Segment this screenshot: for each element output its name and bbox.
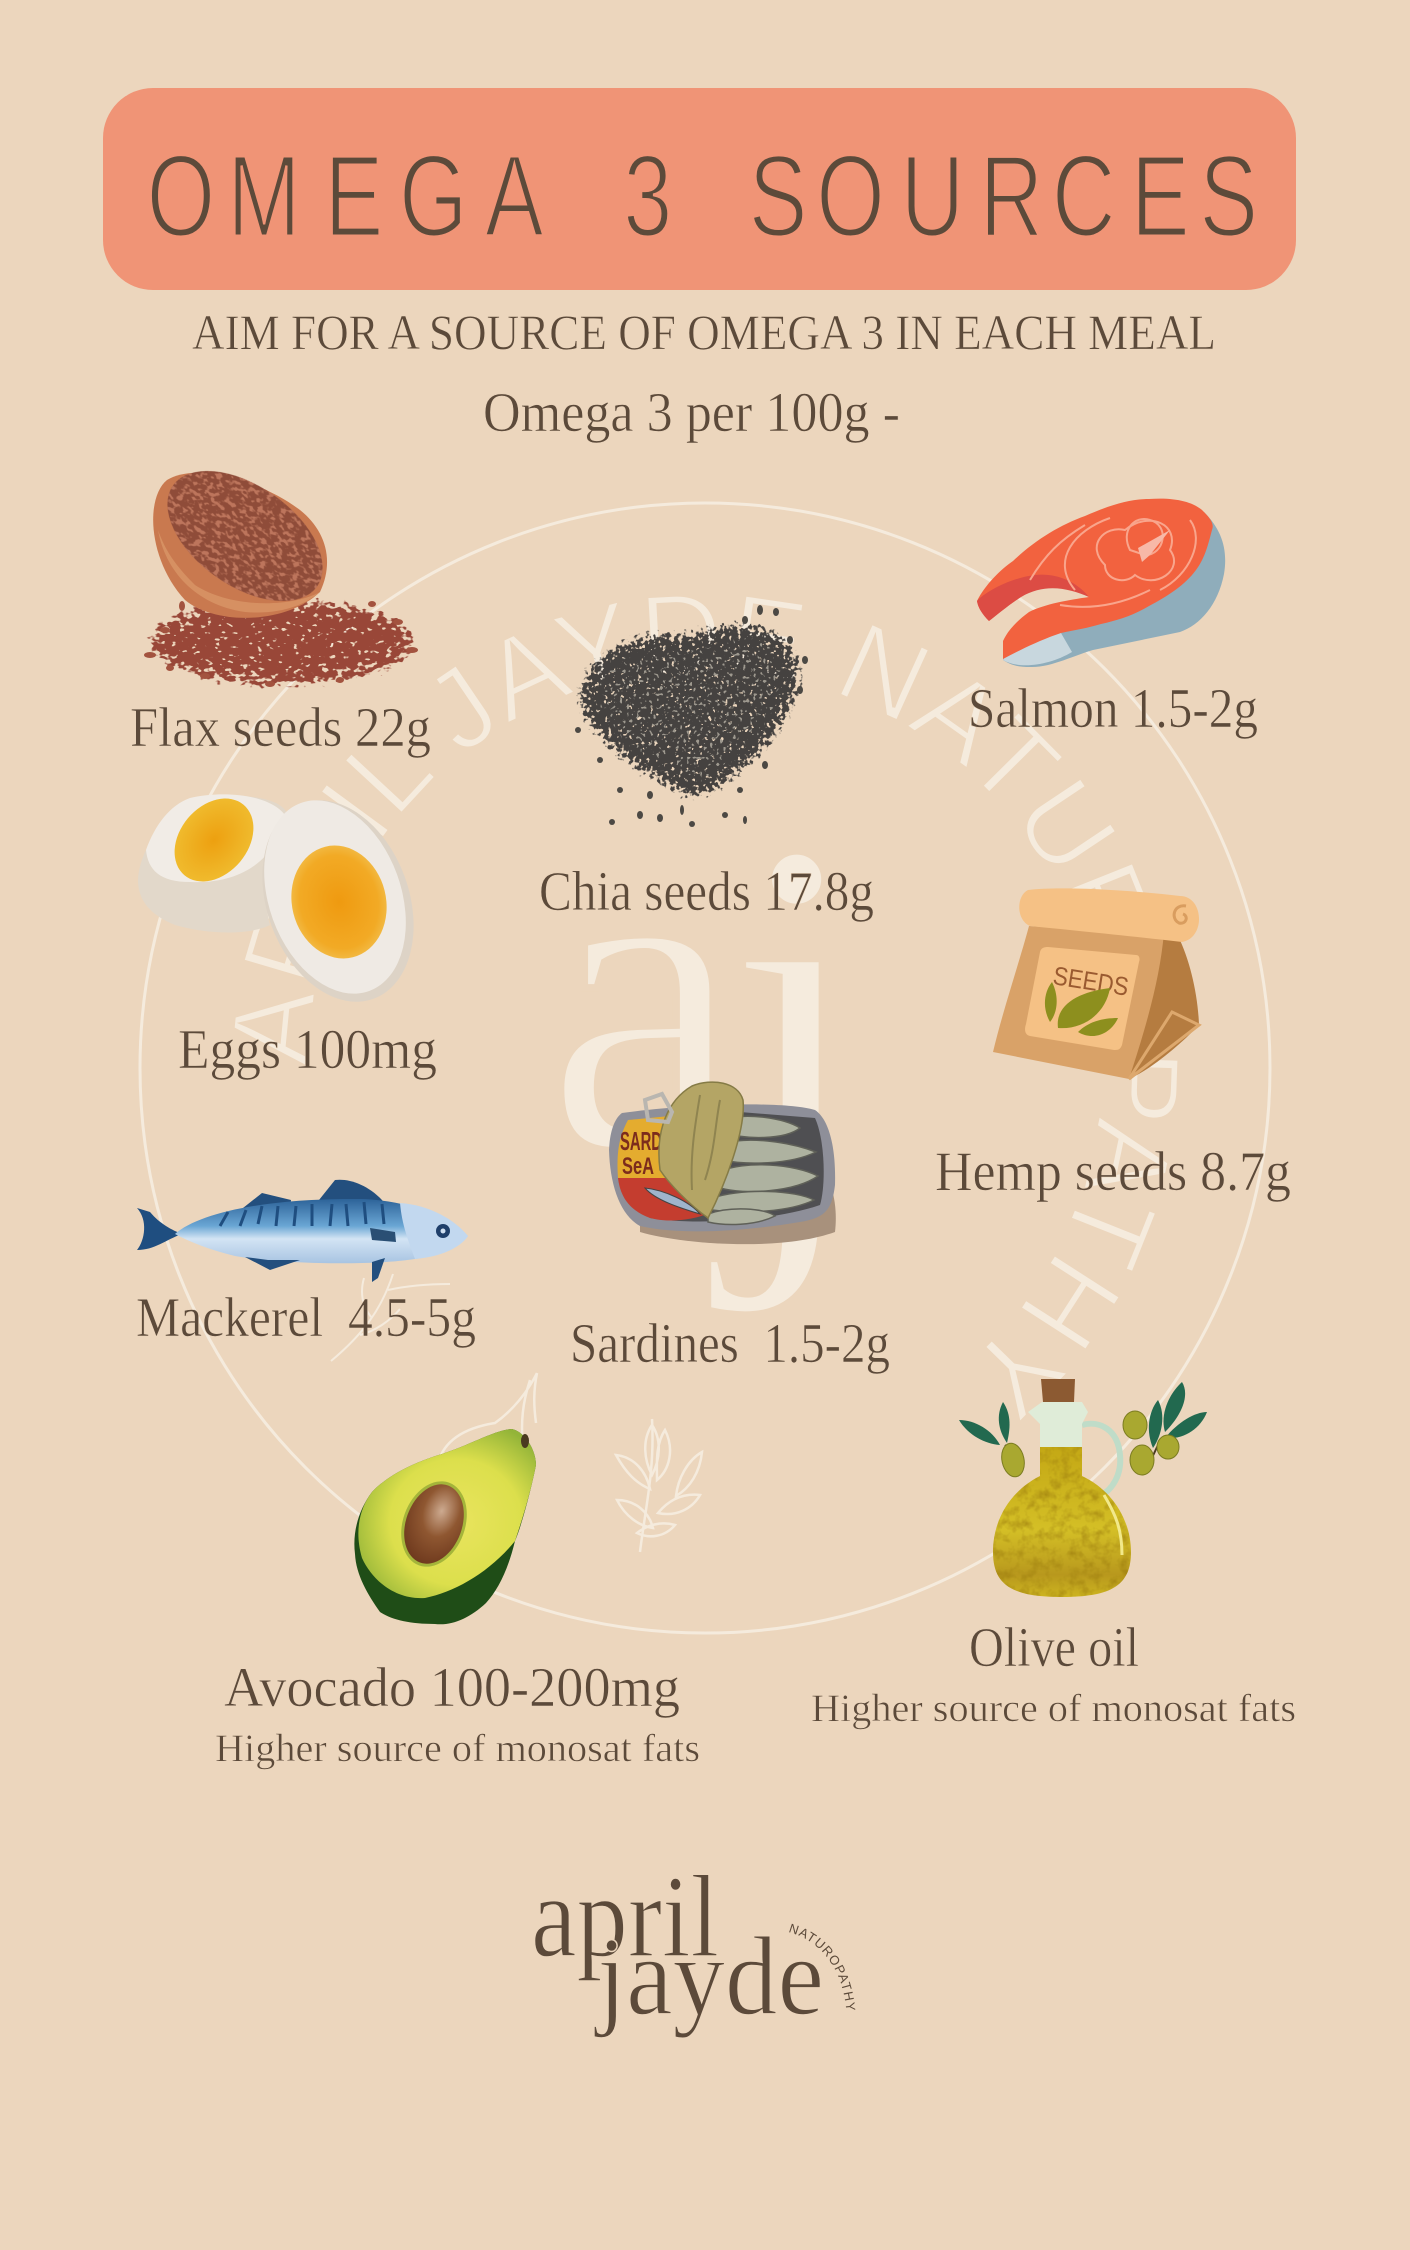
flax seeds [130,445,431,759]
title text: OMEGA 3 SOURCES [147,131,1258,261]
icon: olive oil bottle with olives [959,1379,1207,1597]
watermark circular text: APRIL JAYDE NATUROPATHY [234,596,1178,1420]
section heading: Omega 3 per 100g - [483,382,900,444]
icon: sardine tin: SeA [622,1153,654,1180]
icon: salmon steak [977,499,1225,667]
logo word april: april [531,1851,719,1982]
label: Sardines 1.5-2g [570,1313,890,1375]
logo word jayde: jayde [593,1915,824,2039]
label: Olive oil [969,1617,1139,1679]
decorative garlic outline [438,1373,537,1487]
label: Salmon 1.5-2g [968,678,1258,740]
decorative sprig behind mackerel label [331,1274,450,1361]
banner pill [103,88,1296,290]
chia seeds [539,605,874,923]
label: Mackerel 4.5-5g [136,1287,476,1349]
watermark monogram aj: j [706,730,870,1318]
mackerel [136,1180,476,1349]
icon: seed bag: SEEDS [1051,960,1131,1002]
icon: sardine tin [609,1082,836,1244]
icon: chia seed pile [575,605,808,827]
note: Higher source of monosat fats [811,1687,1296,1730]
label: Eggs 100mg [178,1019,437,1081]
subtitle: AIM FOR A SOURCE OF OMEGA 3 IN EACH MEAL [192,304,1216,360]
title banner [103,88,1296,290]
decorative sprig near avocado [616,1419,702,1552]
icon: halved boiled eggs [138,779,440,1023]
note: Higher source of monosat fats [215,1727,700,1770]
watermark ring [140,503,1270,1633]
watermark: brand circle and monogram [138,502,1272,1634]
icon: mackerel fish [137,1180,468,1282]
label: Chia seeds 17.8g [539,861,874,923]
label: Flax seeds 22g [130,697,431,759]
salmon [968,499,1258,740]
watermark monogram aj [545,730,870,1318]
hemp seeds [935,888,1291,1203]
label: Avocado 100-200mg [224,1657,680,1719]
avocado [215,1429,700,1770]
icon: seed bag [993,888,1199,1079]
logo curved naturopathy: NATUROPATHY [789,1924,856,2010]
icon: flax bowl and seeds [144,445,418,687]
eggs [138,779,440,1081]
icon: sardine tin: SARD [620,1126,662,1156]
watermark monogram aj: a [545,746,745,1244]
logo: april jayde naturopathy [531,1851,856,2039]
olive oil [811,1379,1296,1730]
label: Hemp seeds 8.7g [935,1141,1291,1203]
sardines [570,1082,890,1375]
icon: avocado half [354,1429,536,1624]
